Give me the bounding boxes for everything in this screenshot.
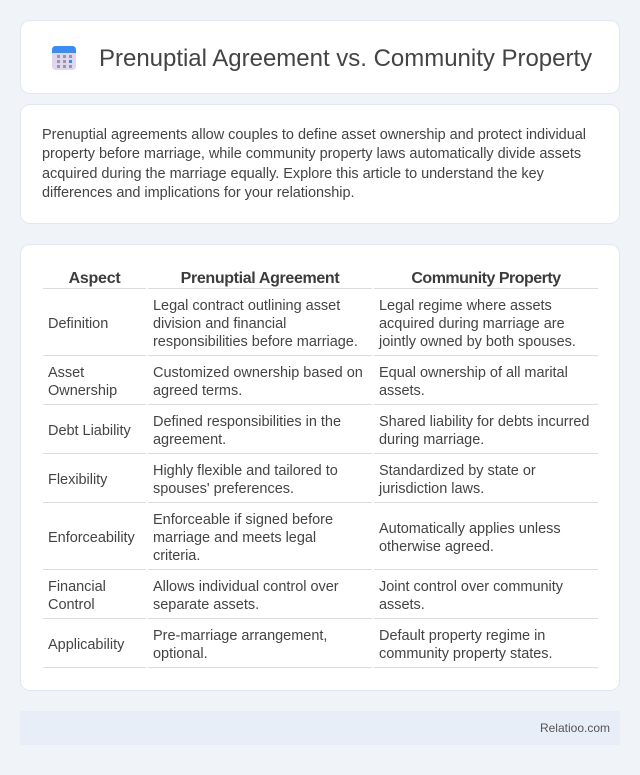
footer text: Relatioo.com: [540, 721, 610, 735]
row: Asset Ownership: agreed terms.: [153, 383, 242, 399]
row: Debt Liability: agreement.: [153, 432, 226, 448]
text block: introduction: acquired during the marriage equally. Explore this article to understand the key: [42, 166, 544, 182]
row: Enforceability: criteria.: [153, 548, 200, 564]
text block: introduction: property before marriage, while community property laws automatically divide assets: [42, 146, 581, 162]
row: Definition: jointly owned by both spouses.: [379, 334, 576, 350]
footer bar: [20, 711, 620, 745]
text block: introduction: [42, 127, 586, 201]
row: Flexibility: Standardized by state or: [379, 463, 536, 479]
row: Enforceability: Automatically applies unless: [379, 521, 561, 537]
row: Applicability: Applicability: [48, 637, 124, 653]
row: Flexibility: jurisdiction laws.: [379, 481, 484, 497]
row: Debt Liability: Shared liability for debts incurred: [379, 414, 589, 430]
panel: title card: [20, 20, 620, 94]
row: Definition: Definition: [48, 316, 108, 332]
row: Applicability: Pre-marriage arrangement,: [153, 628, 327, 644]
row: Definition: Legal regime where assets: [379, 298, 552, 314]
row: Enforceability: otherwise agreed.: [379, 539, 494, 555]
row: Definition: Legal contract outlining asset: [153, 298, 340, 314]
row: Definition: acquired during marriage are: [379, 316, 565, 332]
row: Asset Ownership: Customized ownership based on: [153, 365, 363, 381]
row: Applicability: community property states.: [379, 646, 553, 662]
row: Financial Control: Control: [48, 597, 95, 613]
row: Enforceability: Enforceability: [48, 530, 135, 546]
panel: comparison table: [20, 244, 620, 691]
row: Debt Liability: during marriage.: [379, 432, 484, 448]
row: Definition: division and financial: [153, 316, 286, 332]
row: Financial Control: Financial: [48, 579, 106, 595]
row: Flexibility: Flexibility: [48, 472, 107, 488]
row: Enforceability: marriage and meets legal: [153, 530, 316, 546]
row: Debt Liability: Defined responsibilities in the: [153, 414, 341, 430]
icon: calendar: [52, 46, 76, 70]
row: Financial Control: Allows individual control over: [153, 579, 339, 595]
row: Enforceability: Enforceable if signed before: [153, 512, 333, 528]
title: Prenuptial Agreement vs. Community Property: [99, 45, 592, 72]
row: Financial Control: assets.: [379, 597, 425, 613]
row: Applicability: Default property regime in: [379, 628, 545, 644]
panel: introduction: [20, 104, 620, 224]
row: Financial Control: separate assets.: [153, 597, 259, 613]
row: Definition: responsibilities before marriage.: [153, 334, 358, 350]
row: Financial Control: Joint control over community: [379, 579, 563, 595]
row: Debt Liability: Debt Liability: [48, 423, 131, 439]
row: Asset Ownership: Equal ownership of all marital: [379, 365, 568, 381]
row: Asset Ownership: assets.: [379, 383, 425, 399]
row: Flexibility: Highly flexible and tailored to: [153, 463, 338, 479]
text block: introduction: Prenuptial agreements allow couples to define asset ownership and protect individual: [42, 127, 586, 143]
column heading: Community Property: Community Property: [411, 270, 561, 287]
row: Applicability: optional.: [153, 646, 208, 662]
column heading: Aspect: Aspect: [69, 270, 120, 287]
row: Asset Ownership: Ownership: [48, 383, 117, 399]
row: Asset Ownership: Asset: [48, 365, 84, 381]
column heading: Prenuptial Agreement: Prenuptial Agreement: [181, 270, 339, 287]
row: Flexibility: spouses' preferences.: [153, 481, 294, 497]
text block: introduction: differences and implications for your relationship.: [42, 185, 355, 201]
